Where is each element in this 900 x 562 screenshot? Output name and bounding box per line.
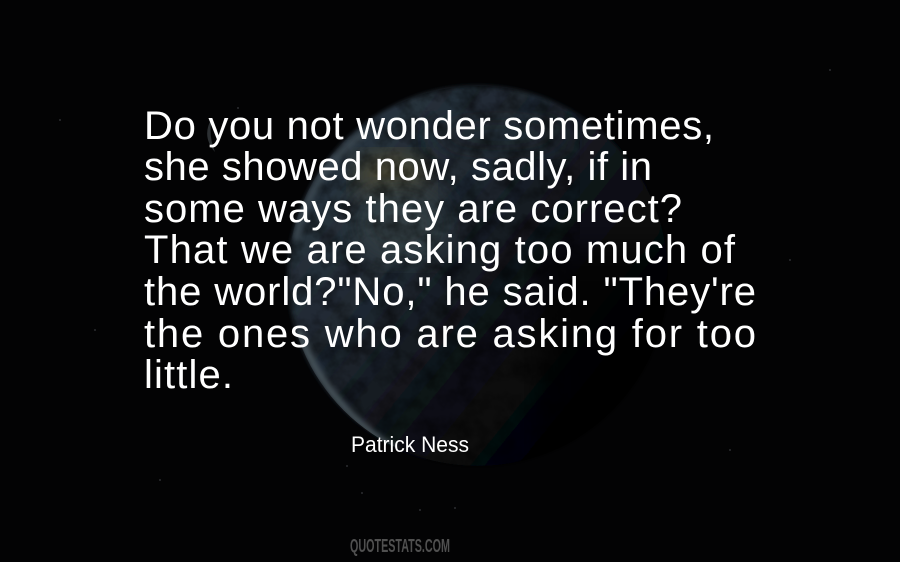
moon crescent <box>207 118 215 152</box>
quote text: some ways they are correct? <box>144 187 682 231</box>
quote text: she showed now, sadly, if in <box>144 145 652 189</box>
quote text: little. <box>144 353 233 397</box>
quote text: the ones who are asking for too <box>144 312 756 356</box>
quote text <box>144 104 756 397</box>
watermark: QUOTESTATS.COM <box>350 536 450 556</box>
stars <box>59 69 831 511</box>
earth image <box>286 84 663 466</box>
quote text: the world?"No," he said. "They're <box>144 270 756 314</box>
infographic canvas <box>59 69 831 556</box>
quote text: Do you not wonder sometimes, <box>144 104 714 148</box>
quote text: That we are asking too much of <box>144 228 736 272</box>
author: Patrick Ness <box>351 432 469 457</box>
